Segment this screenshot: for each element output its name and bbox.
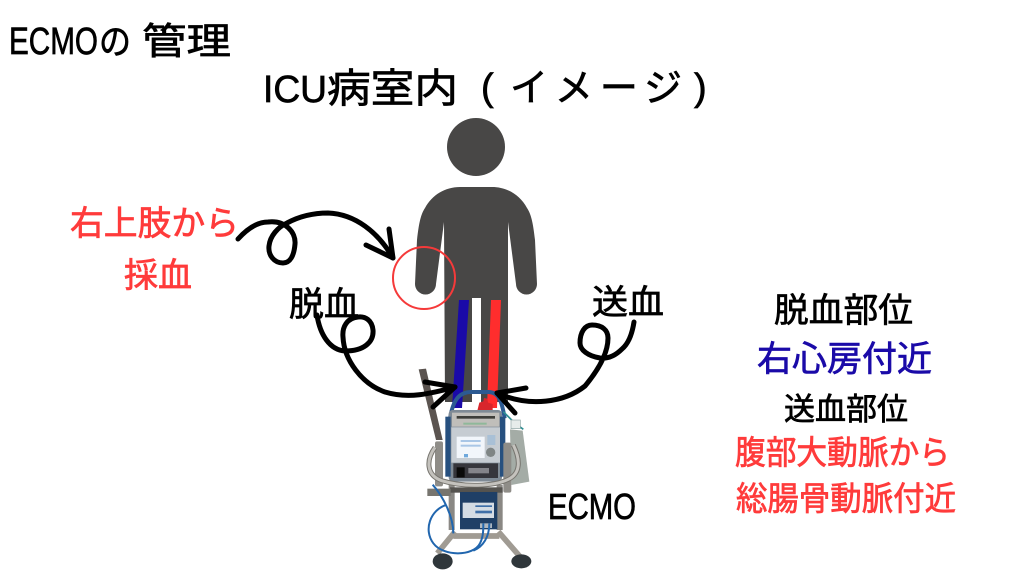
label: blood sampling from right upper limb	[70, 205, 239, 295]
arrow: ECMO return from right	[497, 322, 634, 413]
tube: blue drainage line	[452, 300, 469, 408]
heading: ICU room	[263, 67, 707, 111]
arrow: drainage to ECMO	[317, 315, 455, 407]
side bag	[510, 429, 529, 485]
heading: ICU room: ICU	[263, 69, 327, 111]
text block: drainage site: 右心房付近	[757, 340, 932, 379]
top arch	[450, 392, 505, 418]
main console body	[449, 410, 502, 482]
label: return: 送血	[592, 284, 664, 322]
tube: red return line	[487, 300, 501, 408]
text block: return site: 送血部位	[784, 392, 908, 427]
label: drainage: 脱血	[289, 286, 359, 324]
heading: ICU room: 病室内	[327, 67, 458, 111]
handle posts	[435, 441, 443, 486]
wheels	[433, 553, 453, 569]
lower unit	[450, 487, 503, 493]
label: blood sampling from right upper limb: 右上肢から	[70, 205, 239, 243]
title: ECMO	[9, 21, 98, 63]
shelf	[427, 489, 451, 496]
heading: ICU room: イメージ	[510, 68, 682, 110]
console ports	[453, 463, 498, 478]
red circle: blood sampling site	[393, 247, 455, 309]
text block: return site	[735, 392, 956, 517]
icon: ECMO machine	[419, 369, 531, 569]
handle bar	[429, 445, 518, 485]
label: blood sampling from right upper limb: 採血	[124, 257, 192, 295]
text block: drainage site	[757, 292, 932, 379]
heading: ICU room: (	[481, 67, 494, 109]
title: 管理	[142, 21, 231, 62]
icon: person silhouette	[415, 118, 537, 402]
text block: return site: 総腸骨動脈付近	[736, 480, 956, 517]
red connector	[477, 398, 493, 411]
title: の	[99, 21, 131, 62]
title	[9, 21, 231, 63]
text block: drainage site: 脱血部位	[774, 292, 913, 330]
arrow: blood sampling to right arm	[238, 213, 393, 263]
heading: ICU room: )	[694, 67, 707, 109]
blue hoses	[429, 485, 489, 553]
callout: ECMO label: ECMO	[548, 486, 636, 527]
console header	[452, 413, 499, 427]
IV pole	[419, 369, 443, 440]
console screen panel	[451, 427, 500, 463]
stand legs	[437, 532, 521, 557]
text block: return site: 腹部大動脈から	[735, 434, 950, 471]
